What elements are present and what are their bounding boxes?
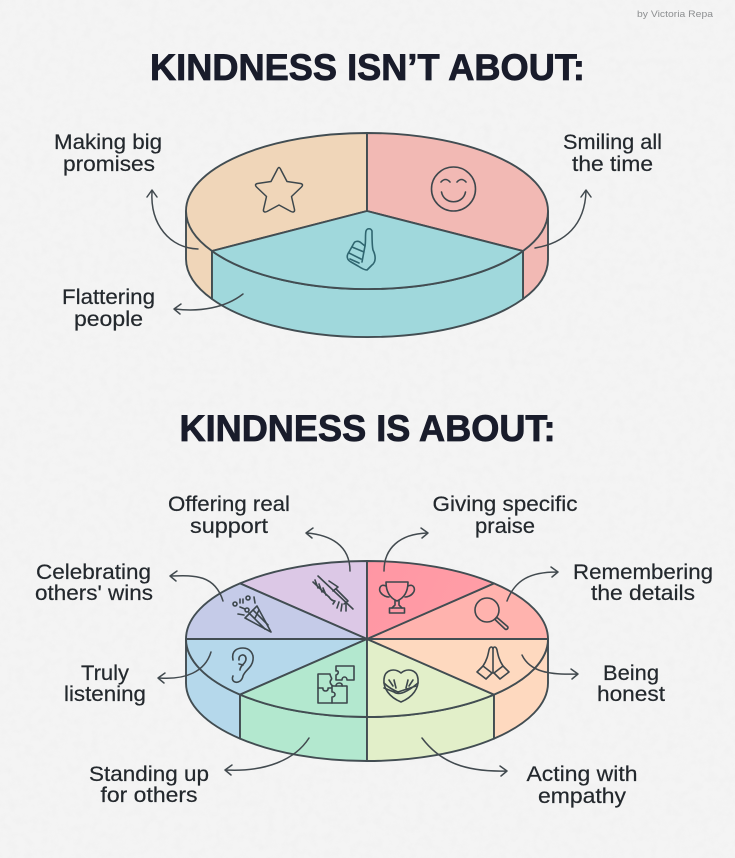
label: remembering the details: the details	[591, 582, 695, 605]
icon: smiley	[432, 167, 476, 211]
label: making big promises	[54, 131, 162, 176]
side: mint	[240, 695, 367, 761]
icon: star	[255, 168, 303, 212]
label: smiling all the time	[563, 131, 662, 176]
arrow: flattering people	[174, 294, 243, 314]
title: kindness is about: KINDNESS IS ABOUT:	[180, 408, 556, 449]
label: truly listening: listening	[64, 683, 146, 706]
label: making big promises: promises	[63, 153, 155, 176]
label: being honest: Being	[603, 662, 659, 685]
icon: thumbs up	[347, 229, 375, 270]
pie chart: what kindness is	[186, 561, 548, 761]
label: being honest: honest	[597, 683, 665, 706]
label: acting with empathy	[526, 763, 638, 808]
icon: puzzle	[318, 666, 354, 703]
side: peach	[494, 639, 548, 739]
slice: mint	[240, 639, 367, 717]
slice: periwinkle	[186, 583, 367, 639]
label: offering real support	[168, 493, 290, 538]
label: smiling all the time: the time	[572, 153, 653, 176]
title: kindness isn't about: KINDNESS ISN’T ABOUT:	[150, 47, 585, 88]
arrow: celebrating others' wins	[170, 571, 223, 601]
side: sky	[186, 639, 240, 739]
label: acting with empathy: Acting with	[526, 763, 638, 786]
label: being honest	[597, 662, 665, 706]
slice: teal side	[212, 251, 523, 337]
credit: by Victoria Repa	[637, 9, 714, 20]
arrow: smiling all the time	[535, 190, 591, 248]
slice: teal top	[212, 211, 523, 289]
label: celebrating others' wins: Celebrating	[36, 561, 151, 584]
slice: pink side	[523, 211, 548, 299]
arrow: offering real support	[306, 528, 350, 571]
icon: heart hug	[384, 670, 418, 702]
side: lime	[367, 695, 494, 761]
label: offering real support: support	[190, 515, 268, 538]
slice: red	[367, 561, 494, 639]
slice: purple	[240, 561, 367, 639]
label: standing up for others: Standing up	[89, 763, 209, 786]
label: giving specific praise: Giving specific	[432, 493, 578, 516]
label: flattering people: Flattering	[62, 286, 155, 309]
label: offering real support: Offering real	[168, 493, 290, 516]
icon: handshake	[313, 576, 353, 611]
label: truly listening: Truly	[81, 662, 130, 685]
label: flattering people	[62, 286, 155, 331]
slice: orange side	[186, 211, 212, 299]
label: giving specific praise	[432, 493, 578, 538]
pie chart: what kindness isn't	[186, 133, 548, 337]
arrow: making big promises	[147, 190, 198, 249]
arrow: remembering the details	[507, 567, 558, 601]
icon: magnifier	[475, 598, 508, 629]
arrow: standing up for others	[225, 738, 309, 775]
label: celebrating others' wins	[35, 561, 153, 605]
label: standing up for others	[89, 763, 209, 807]
slice: peach	[367, 639, 548, 695]
slice: lime	[367, 639, 494, 717]
arrow: acting with empathy	[422, 738, 507, 776]
label: smiling all the time: Smiling all	[563, 131, 662, 154]
label: giving specific praise: praise	[475, 515, 535, 538]
slice: salmon	[367, 583, 548, 639]
arrow: being honest	[522, 655, 578, 679]
label: celebrating others' wins: others' wins	[35, 582, 153, 605]
icon: party popper	[233, 596, 271, 632]
label: standing up for others: for others	[100, 784, 198, 807]
icon: praying hands	[477, 647, 509, 679]
arrow: giving specific praise	[384, 528, 428, 571]
label: remembering the details	[573, 561, 713, 605]
label: remembering the details: Remembering	[573, 561, 713, 584]
slice: orange top	[186, 133, 367, 251]
slice: sky	[186, 639, 367, 695]
label: acting with empathy: empathy	[538, 785, 627, 808]
arrow: truly listening	[158, 652, 211, 683]
label: flattering people: people	[74, 308, 143, 331]
icon: ear	[232, 648, 253, 682]
label: making big promises: Making big	[54, 131, 162, 154]
label: truly listening	[64, 662, 146, 706]
slice: pink top	[367, 133, 548, 251]
icon: trophy	[380, 582, 414, 613]
